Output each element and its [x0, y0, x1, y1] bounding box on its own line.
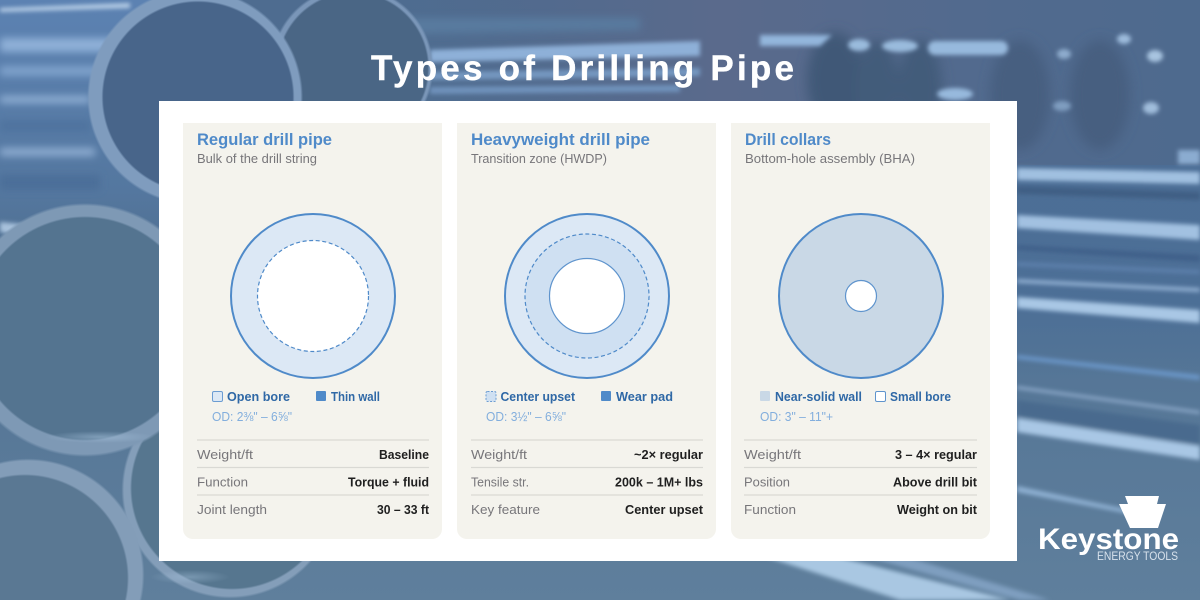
pipe cross-section diagram: [779, 214, 943, 378]
card background: [457, 123, 716, 539]
card background: [183, 123, 442, 539]
legend: center upset: Center upset: [500, 390, 576, 404]
spec table: Weight on bit: [897, 502, 978, 517]
spec table: [471, 440, 704, 517]
heading: Regular drill pipe: [197, 130, 332, 149]
spec table: [744, 440, 978, 517]
spec table: Key feature: [471, 502, 540, 517]
spec table: Weight/ft: [744, 447, 801, 462]
card background: [731, 123, 990, 539]
spec table: Tensile str.: [471, 474, 529, 490]
spec table: Weight/ft: [197, 447, 253, 462]
spec table: Function: [197, 474, 248, 490]
spec table: 3 – 4× regular: [895, 447, 977, 462]
panel: heavyweight drill pipe: [457, 123, 716, 539]
title: Types of Drilling Pipe: [371, 49, 794, 88]
white content panel: [159, 101, 1017, 561]
subheading: Bottom-hole assembly (BHA): [745, 151, 915, 166]
spec table: Function: [744, 502, 796, 517]
spec table: Joint length: [197, 502, 267, 517]
spec table: Weight/ft: [471, 447, 527, 462]
spec table: [197, 440, 430, 517]
subheading: Bulk of the drill string: [197, 151, 317, 166]
spec table: Baseline: [379, 447, 429, 462]
outer diameter note: OD: 3½" – 6⅝": [486, 409, 566, 424]
outer diameter note: OD: 2⅜" – 6⅝": [212, 409, 292, 424]
spec table: ~2× regular: [634, 447, 703, 462]
legend: near-solid wall: Near-solid wall: [775, 390, 862, 404]
panel: regular drill pipe: [183, 123, 442, 539]
legend: open bore: Open bore: [227, 390, 290, 404]
pipe cross-section diagram: [505, 214, 669, 378]
heading: Heavyweight drill pipe: [471, 130, 650, 149]
spec table: Position: [744, 474, 790, 490]
spec table: Torque + fluid: [348, 474, 429, 490]
spec table: 200k – 1M+ lbs: [615, 474, 703, 490]
panel: drill collars: [731, 123, 990, 539]
spec table: Above drill bit: [893, 474, 978, 490]
spec table: Center upset: [625, 502, 704, 517]
legend: wear pad: Wear pad: [616, 390, 673, 404]
logo: Keystone Energy Tools: [1038, 496, 1179, 563]
heading: Drill collars: [745, 130, 831, 149]
logo wordmark: Keystone: [1038, 523, 1179, 556]
legend: small bore: Small bore: [890, 390, 951, 404]
icon: keystone: [1119, 496, 1166, 528]
logo tagline: ENERGY TOOLS: [1097, 551, 1178, 563]
outer diameter note: OD: 3" – 11"+: [760, 409, 833, 424]
spec table: 30 – 33 ft: [377, 502, 430, 517]
legend: thin wall: Thin wall: [331, 390, 380, 404]
pipe cross-section diagram: [231, 214, 395, 378]
subheading: Transition zone (HWDP): [471, 151, 607, 166]
